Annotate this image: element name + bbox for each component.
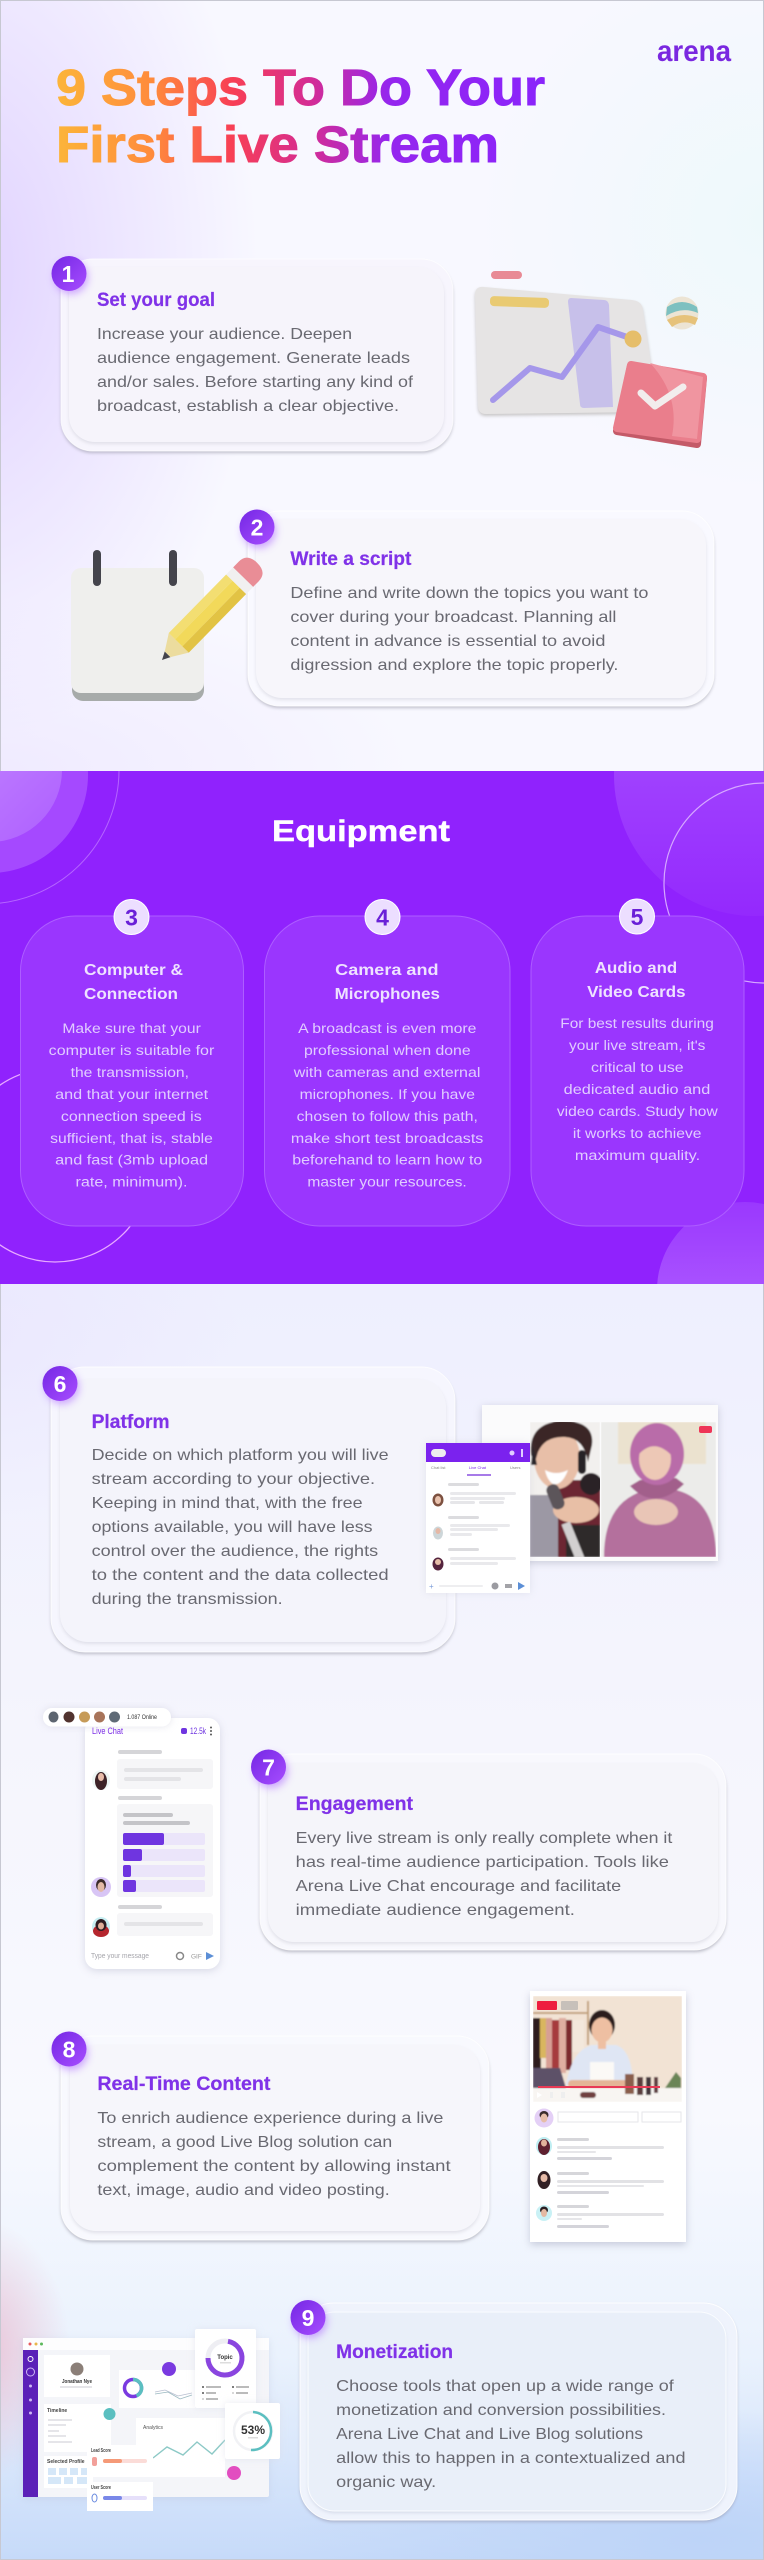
heading: Video Cards	[587, 984, 686, 1001]
body text: text, image, audio and video posting.	[97, 2182, 390, 2199]
timeline card: Timeline	[47, 2408, 67, 2414]
title: 9 Steps To Do Your	[56, 59, 545, 116]
chat phone mockup: Type your message	[91, 1951, 149, 1960]
body text: To enrich audience experience during a live	[97, 2110, 444, 2127]
lead score card: Lead Score	[91, 2448, 111, 2454]
body text: make short test broadcasts	[291, 1131, 484, 1146]
card: step 5 audio and video cards	[531, 899, 744, 1226]
poll bars	[123, 1833, 205, 1892]
heading: Set your goal	[97, 290, 215, 311]
icon: chart board with check	[475, 271, 703, 444]
body text: and that your internet	[55, 1087, 208, 1102]
badge: 3	[114, 900, 149, 934]
badge: 7	[251, 1750, 288, 1788]
online users pill: 1.087 Online	[127, 1715, 158, 1721]
body text: beforehand to learn how to	[292, 1152, 482, 1168]
body text: rate, minimum).	[76, 1174, 188, 1190]
body text: Every live stream is only really complete when it	[296, 1830, 673, 1847]
badge: 4: 4	[376, 904, 389, 930]
user score card	[87, 2482, 153, 2511]
body text: and fast (3mb upload	[55, 1152, 208, 1168]
chat panel	[426, 1443, 530, 1593]
topic donut card	[195, 2329, 256, 2408]
chat phone mockup: Live Chat	[92, 1726, 123, 1736]
chat phone mockup: GIF	[191, 1954, 202, 1960]
body text: A broadcast is even more	[298, 1021, 476, 1036]
chat phone mockup: 12.5k	[190, 1726, 206, 1736]
heading	[587, 960, 686, 1001]
body text: computer is suitable for	[49, 1043, 215, 1058]
body text: and/or sales. Before starting any kind of	[97, 374, 414, 391]
badge: 4	[365, 900, 400, 934]
body text: it works to achieve	[573, 1126, 702, 1141]
badge: 9: 9	[302, 2305, 314, 2331]
chart card	[119, 2362, 195, 2408]
analytics line chart card: Analytics	[143, 2425, 163, 2431]
heading: Monetization	[336, 2342, 453, 2363]
body text: organic way.	[336, 2474, 436, 2491]
badge: 5: 5	[631, 904, 644, 930]
body text: Arena Live Chat encourage and facilitate	[296, 1878, 621, 1895]
chat panel: Live Chat	[469, 1465, 487, 1470]
check card	[617, 363, 703, 444]
card: step 3 computer and connection	[20, 900, 244, 1226]
body text: Increase your audience. Deepen	[97, 326, 352, 343]
lead score card	[87, 2445, 153, 2477]
body text: to the content and the data collected	[92, 1567, 389, 1584]
body text: during the transmission.	[92, 1591, 283, 1608]
53% ring card: 53%	[241, 2423, 265, 2437]
body text: dedicated audio and	[564, 1082, 710, 1097]
card: step 4 camera and microphones	[264, 900, 510, 1226]
badge: 7: 7	[262, 1754, 275, 1780]
heading: Audio and	[595, 960, 677, 977]
heading	[335, 962, 440, 1003]
body text: Define and write down the topics you want to	[290, 585, 649, 602]
title	[56, 59, 545, 173]
body text	[336, 2378, 686, 2491]
ball	[666, 296, 698, 330]
body text: master your resources.	[307, 1174, 467, 1190]
body text: Make sure that your	[62, 1021, 201, 1036]
body text: stream, a good Live Blog solution can	[97, 2134, 392, 2151]
badge: 8	[52, 2032, 88, 2070]
heading: Computer &	[84, 962, 183, 979]
body text: microphones. If you have	[300, 1087, 475, 1102]
comment input	[534, 2108, 681, 2128]
analytics dashboard mockup	[23, 2329, 280, 2511]
heading: Equipment: Equipment	[272, 815, 450, 848]
body text: Choose tools that open up a wide range of	[336, 2378, 674, 2395]
video: woman presenting	[533, 1996, 682, 2102]
body text: has real-time audience participation. Tools like	[296, 1854, 669, 1871]
heading: Engagement	[296, 1794, 414, 1815]
video: woman with pink hair	[601, 1422, 716, 1557]
body text: monetization and conversion possibilities.	[336, 2402, 666, 2419]
body text: allow this to happen in a contextualized and	[336, 2450, 686, 2467]
53% ring card	[225, 2403, 280, 2459]
body text: your live stream, it's	[569, 1038, 706, 1053]
heading: Connection	[84, 986, 178, 1003]
analytics line chart card	[136, 2418, 225, 2477]
badge: 6	[42, 1366, 79, 1404]
user score card: User Score	[91, 2485, 111, 2491]
badge: 3: 3	[125, 904, 138, 930]
title: First Live Stream	[56, 116, 499, 173]
heading: Camera and	[335, 962, 438, 979]
logo: arena: arena	[657, 35, 731, 68]
panel: step 6	[42, 1366, 455, 1654]
body text: professional when done	[304, 1043, 471, 1058]
topic donut card: Topic	[217, 2355, 233, 2361]
panel: equipment section	[0, 771, 764, 1284]
badge: 1	[52, 256, 88, 294]
body text: cover during your broadcast. Planning all	[290, 609, 616, 626]
body text: immediate audience engagement.	[296, 1902, 575, 1919]
body text	[92, 1447, 389, 1608]
body text: maximum quality.	[575, 1148, 700, 1163]
heading: Platform	[92, 1412, 170, 1433]
video: man with microphone	[530, 1421, 602, 1560]
selected profile card: Selected Profile	[47, 2459, 85, 2465]
body text: Decide on which platform you will live	[92, 1447, 389, 1464]
comments	[536, 2137, 664, 2228]
body text	[97, 2110, 451, 2199]
body text: Arena Live Chat and Live Blog solutions	[336, 2426, 643, 2443]
body text: options available, you will have less	[92, 1519, 373, 1536]
heading: Write a script	[290, 549, 412, 570]
body text	[49, 1021, 215, 1190]
heading	[84, 962, 183, 1003]
body text: broadcast, establish a clear objective.	[97, 398, 399, 415]
chat panel: Users	[510, 1465, 520, 1470]
badge: 1: 1	[62, 261, 75, 287]
selected profile card	[44, 2456, 93, 2488]
chat phone mockup	[43, 1708, 220, 1971]
body text: sufficient, that is, stable	[50, 1131, 213, 1146]
body text: audience engagement. Generate leads	[97, 350, 410, 367]
body text: chosen to follow this path,	[297, 1109, 478, 1124]
timeline card	[44, 2404, 116, 2452]
panel: step 7	[251, 1750, 726, 1952]
body text: complement the content by allowing instant	[97, 2158, 451, 2175]
body text	[290, 585, 649, 674]
panel: step 2	[240, 510, 714, 708]
body text: control over the audience, the rights	[92, 1543, 378, 1560]
badge: 2	[240, 510, 276, 548]
body text: video cards. Study how	[557, 1104, 718, 1119]
badge: 2: 2	[251, 514, 263, 540]
body text: Keeping in mind that, with the free	[92, 1495, 363, 1512]
board	[475, 287, 657, 416]
body text: content in advance is essential to avoid	[290, 633, 605, 650]
profile card	[44, 2355, 110, 2397]
chat panel: +	[429, 1582, 434, 1591]
body text: digression and explore the topic properly.	[290, 657, 618, 674]
live blog mockup	[530, 1991, 686, 2245]
panel: step 8	[52, 2032, 489, 2242]
pill	[491, 271, 522, 279]
body text: stream according to your objective.	[92, 1471, 375, 1488]
body text	[291, 1021, 484, 1190]
body text: critical to use	[591, 1060, 684, 1075]
body text: the transmission,	[71, 1065, 189, 1080]
sidebar	[23, 2350, 38, 2497]
body text	[557, 1016, 718, 1163]
body text	[97, 326, 414, 415]
panel: step 1	[52, 256, 453, 453]
badge: 9	[290, 2300, 327, 2338]
heading: Microphones	[335, 986, 440, 1003]
panel: step 9	[290, 2300, 737, 2522]
chat panel: Chat list	[431, 1465, 446, 1470]
heading: Real-Time Content	[97, 2074, 271, 2095]
badge: 6: 6	[54, 1371, 66, 1397]
online users pill	[43, 1708, 171, 1726]
body text: with cameras and external	[293, 1065, 480, 1080]
video call screenshot	[426, 1405, 718, 1593]
icon: notepad and pencil	[71, 550, 267, 701]
body text: For best results during	[560, 1016, 714, 1031]
badge: 5	[620, 899, 654, 934]
profile card: Jonathan Nye	[62, 2379, 92, 2385]
badge: 8: 8	[63, 2036, 76, 2062]
body text	[296, 1830, 673, 1919]
body text: connection speed is	[61, 1109, 202, 1124]
